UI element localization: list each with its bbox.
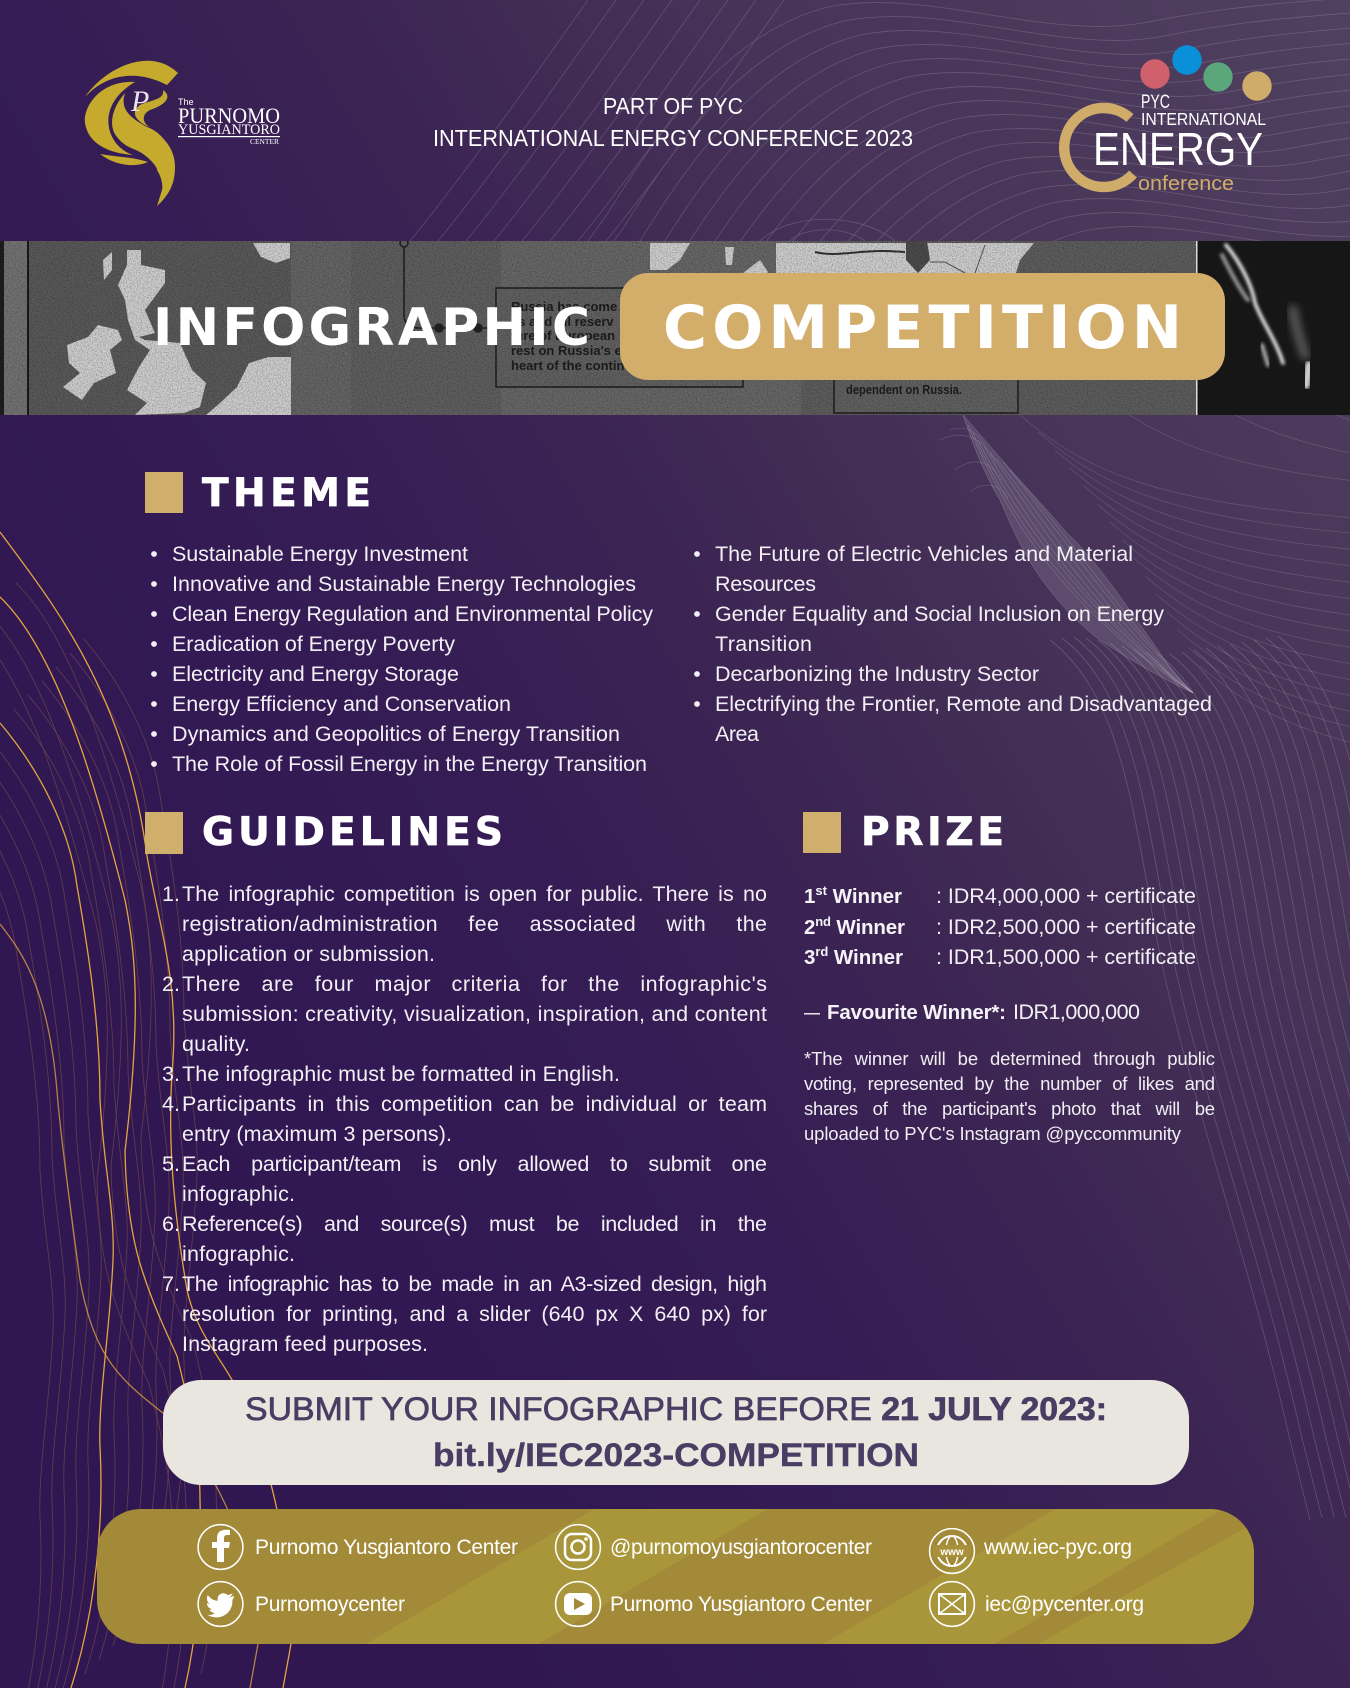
- theme list: left column: Energy Efficiency and Conservation: [172, 692, 511, 716]
- guidelines list: 4.: [162, 1092, 180, 1116]
- header text: PART OF PYC: [603, 93, 743, 119]
- header: Purnomo Yusgiantoro Center logo: [85, 61, 280, 206]
- guidelines list: 5.: [162, 1152, 180, 1176]
- dark photo strip: [1196, 241, 1350, 415]
- prize list: Winner: [828, 946, 903, 969]
- icon: instagram: [556, 1525, 600, 1569]
- facebook label: Purnomo Yusgiantoro Center: [255, 1536, 518, 1559]
- submit call-to-action: SUBMIT YOUR INFOGRAPHIC BEFORE 21 JULY 2023:: [245, 1391, 1107, 1427]
- header: PYC International Energy Conference logo: [1064, 45, 1272, 195]
- map text box: Russia has come of: [511, 299, 634, 314]
- title pill: COMPETITION: COMPETITION: [663, 293, 1182, 363]
- title banner photo: [0, 239, 1350, 415]
- prize list: 3: [804, 946, 815, 969]
- guidelines list: infographic.: [182, 1182, 295, 1206]
- header: PYC International Energy Conference logo: PYC: [1141, 92, 1170, 113]
- header: PYC International Energy Conference logo: ENERGY: [1093, 123, 1263, 175]
- guidelines list: 6.: [162, 1212, 180, 1236]
- guidelines list: Participants in this competition can be individual or team: [182, 1092, 767, 1116]
- prize list: : IDR2,500,000 + certificate: [936, 915, 1196, 939]
- guidelines list: quality.: [182, 1032, 250, 1056]
- theme list: left column: Clean Energy Regulation and Environmental Policy: [172, 602, 653, 626]
- guidelines list: The infographic competition is open for public. There is no: [182, 882, 767, 906]
- guidelines list: 3.: [162, 1062, 180, 1086]
- prize footnote: [804, 1048, 1215, 1144]
- heading: GUIDELINES: GUIDELINES: [202, 810, 503, 855]
- map text box: heart of the continer: [511, 358, 637, 373]
- prize footnote: *The winner will be determined through public: [804, 1048, 1215, 1069]
- heading: THEME: THEME: [202, 471, 371, 516]
- icon: facebook: [198, 1525, 243, 1569]
- guidelines list: 2.: [162, 972, 180, 996]
- header: Purnomo Yusgiantoro Center logo: P: [130, 85, 149, 118]
- footer background: [97, 1509, 1254, 1644]
- guidelines list: Each participant/team is only allowed to submit one: [182, 1152, 767, 1176]
- guidelines list: resolution for printing, and a slider (640 px X 640 px) for: [182, 1302, 767, 1326]
- four coloured dots: [1140, 45, 1272, 101]
- theme list: left column: Electricity and Energy Storage: [172, 662, 459, 686]
- map text box: ture of European: [511, 328, 615, 343]
- prize footnote: uploaded to PYC's Instagram @pyccommunity: [804, 1123, 1182, 1144]
- guidelines list: application or submission.: [182, 942, 435, 966]
- theme list: right column: Resources: [715, 572, 816, 596]
- guidelines list: 7.: [162, 1272, 180, 1296]
- theme list: right column: Area: [715, 722, 759, 746]
- theme list: left column: Innovative and Sustainable Energy Technologies: [172, 572, 636, 596]
- youtube label: Purnomo Yusgiantoro Center: [610, 1593, 872, 1616]
- icon: email: [930, 1582, 974, 1626]
- prize footnote: shares of the participant's photo that will be: [804, 1098, 1215, 1119]
- theme list: right column: Transition: [715, 632, 812, 656]
- instagram label: @purnomoyusgiantorocenter: [610, 1536, 872, 1559]
- twitter label: Purnomoycenter: [255, 1593, 405, 1616]
- theme list: left column: The Role of Fossil Energy in the Energy Transition: [172, 752, 647, 776]
- prize list: : IDR1,500,000 + certificate: [936, 945, 1196, 969]
- title pill: COMPETITION: [620, 273, 1225, 380]
- guidelines list: [162, 882, 767, 1356]
- prize list: 1: [804, 885, 815, 908]
- theme list: left column: Eradication of Energy Poverty: [172, 632, 455, 656]
- prize list: : IDR4,000,000 + certificate: [936, 884, 1196, 908]
- header: Purnomo Yusgiantoro Center logo: YUSGIANTORO: [178, 122, 280, 138]
- prize list: Winner: [831, 916, 905, 939]
- guidelines list: registration/administration fee associated with the: [182, 912, 767, 936]
- guidelines list: The infographic must be formatted in English.: [182, 1062, 620, 1086]
- submit call-to-action: [163, 1380, 1189, 1485]
- theme list: right column: [694, 542, 1212, 746]
- icon: website globe: www: [939, 1547, 964, 1558]
- theme list: left column: Dynamics and Geopolitics of Energy Transition: [172, 722, 620, 746]
- footer contact panel: [97, 1509, 1254, 1644]
- map text box: as and oil reserv: [511, 314, 614, 329]
- map text box: [496, 288, 743, 387]
- theme list: right column: Electrifying the Frontier, Remote and Disadvantaged: [715, 692, 1212, 716]
- map connector line: [400, 239, 496, 332]
- icon: youtube: [556, 1582, 600, 1626]
- website label: www.iec-pyc.org: [983, 1536, 1132, 1559]
- header: Purnomo Yusgiantoro Center logo: The: [178, 97, 194, 107]
- header: PYC International Energy Conference logo: INTERNATIONAL: [1141, 109, 1266, 129]
- map text box 2: dependent on Russia.: [846, 382, 962, 397]
- submit call-to-action: bit.ly/IEC2023-COMPETITION: [433, 1437, 919, 1473]
- guidelines list: Reference(s) and source(s) must be included in the: [182, 1212, 767, 1236]
- header text: INTERNATIONAL ENERGY CONFERENCE 2023: [433, 125, 913, 151]
- theme list: left column: [151, 542, 653, 776]
- logo mark: [85, 61, 178, 206]
- header: Purnomo Yusgiantoro Center logo: CENTER: [250, 138, 279, 146]
- header: PYC International Energy Conference logo: onference: [1138, 173, 1234, 195]
- theme list: right column: Decarbonizing the Industry Sector: [715, 662, 1039, 686]
- header: Purnomo Yusgiantoro Center logo: PURNOMO: [178, 103, 280, 128]
- prize list: nd: [815, 914, 831, 929]
- guidelines list: submission: creativity, visualization, inspiration, and content: [182, 1002, 767, 1026]
- email label: iec@pycenter.org: [985, 1593, 1144, 1616]
- icon: twitter: [198, 1582, 243, 1626]
- map text box: rest on Russia's er: [511, 343, 627, 358]
- prize list: rd: [815, 944, 828, 959]
- favourite winner: IDR1,000,000: [1013, 1000, 1140, 1024]
- guidelines list: infographic.: [182, 1242, 295, 1266]
- map text box 2: [833, 380, 1019, 414]
- map land: [63, 243, 1034, 415]
- prize list: [804, 883, 1196, 969]
- theme list: right column: The Future of Electric Vehicles and Material: [715, 542, 1133, 566]
- favourite winner: [804, 1000, 1140, 1024]
- prize list: 2: [804, 916, 815, 939]
- guidelines list: entry (maximum 3 persons).: [182, 1122, 452, 1146]
- favourite winner: —: [804, 1000, 820, 1024]
- theme list: right column: Gender Equality and Social Inclusion on Energy: [715, 602, 1164, 626]
- guidelines list: The infographic has to be made in an A3-sized design, high: [182, 1272, 767, 1296]
- guidelines list: There are four major criteria for the infographic's: [182, 972, 767, 996]
- guidelines list: 1.: [162, 882, 180, 906]
- favourite winner: Favourite Winner*:: [827, 1001, 1006, 1024]
- heading: PRIZE: PRIZE: [861, 810, 1004, 855]
- prize list: Winner: [827, 885, 902, 908]
- title: INFOGRAPHIC: INFOGRAPHIC: [153, 298, 590, 358]
- theme list: left column: Sustainable Energy Investment: [172, 542, 468, 566]
- guidelines list: Instagram feed purposes.: [182, 1332, 428, 1356]
- icon: website globe: [930, 1529, 974, 1573]
- prize list: st: [815, 883, 828, 898]
- header text: [433, 93, 913, 151]
- prize footnote: voting, represented by the number of likes and: [804, 1073, 1215, 1094]
